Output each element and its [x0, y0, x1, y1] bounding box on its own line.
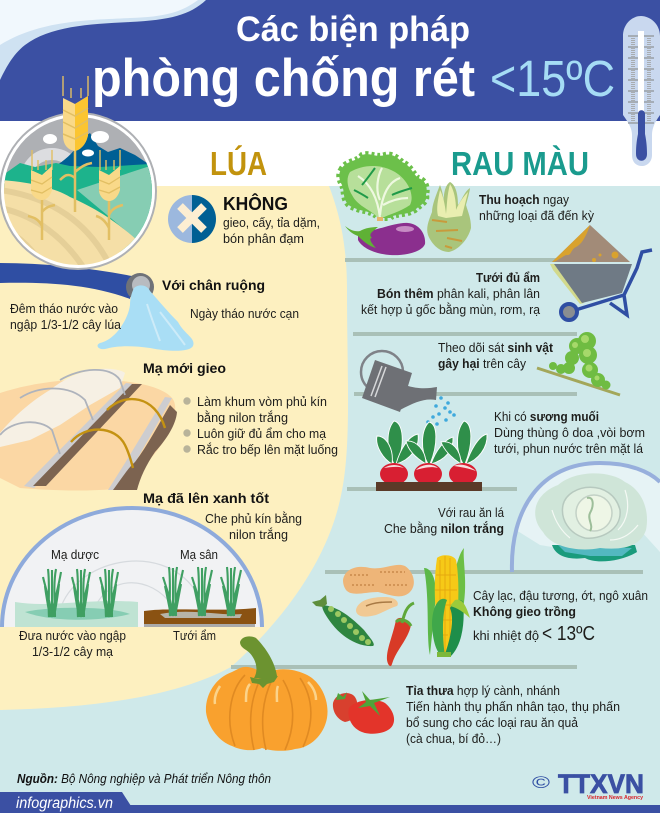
- text: tưới đủ ẩm: Bón thêm phân kali, phân lân: [377, 287, 540, 301]
- panel: lúa background: [0, 186, 348, 710]
- text: sương muối: [494, 410, 645, 456]
- text: không gieo trồng: Cây lạc, đậu tương, ớt, ngô xuân: [473, 589, 648, 603]
- text: tưới đủ ẩm: kết hợp ủ gốc bằng mùn, rơm, rạ: [361, 302, 540, 317]
- title: phòng chống rét: [92, 49, 475, 108]
- illustration: wheelbarrow: [550, 225, 652, 320]
- text: không: gieo, cấy, tỉa dặm,: [223, 216, 320, 230]
- heading: rau màu: RAU MÀU: [451, 145, 589, 182]
- illustration: chili pepper: [387, 603, 414, 666]
- icon: thermometer: [623, 16, 660, 166]
- text: rau ăn lá: [384, 506, 504, 536]
- shelf lines: [231, 258, 643, 669]
- text: mạ mới gieo: [143, 360, 338, 457]
- text: mạ đã lên xanh tốt: nilon trắng: [229, 527, 288, 542]
- illustration: pea pod: [312, 595, 374, 646]
- text: thu hoạch: Thu hoạch ngay: [479, 193, 570, 207]
- text: mạ đã lên xanh tốt: Tưới ẩm: [173, 629, 216, 643]
- text: không gieo trồng: Không gieo trồng: [473, 605, 576, 619]
- logo: TTXVN: TTXVN: [558, 769, 644, 799]
- illustration: pumpkin: [206, 636, 328, 751]
- text: tưới đủ ẩm: [361, 271, 540, 317]
- text: mạ đã lên xanh tốt: Mạ sân: [180, 548, 218, 562]
- title: [92, 10, 615, 108]
- text: sinh vật gây hại: Theo dõi sát sinh vật: [438, 341, 554, 355]
- text: sương muối: tưới, phun nước trên mặt lá: [494, 442, 643, 456]
- text: mạ đã lên xanh tốt: Che phủ kín bằng: [205, 511, 302, 526]
- text: với chân ruộng: Đêm tháo nước vào: [10, 302, 118, 316]
- illustration: watering can: [361, 351, 456, 426]
- illustration: lettuce: [339, 154, 427, 221]
- footer site name: infographics.vn: [16, 795, 113, 812]
- text: với chân ruộng: Ngày tháo nước cạn: [190, 307, 299, 321]
- text: không gieo trồng: [473, 589, 648, 645]
- illustration: radish plants: [376, 421, 487, 491]
- illustration: kohlrabi: [427, 182, 471, 252]
- text: mạ mới gieo: bằng nilon trắng: [197, 410, 288, 425]
- text: sinh vật gây hại: [438, 341, 554, 371]
- text: mạ mới gieo: Rắc tro bếp lên mặt luống: [197, 442, 338, 457]
- illustration: tomatoes: [333, 691, 394, 734]
- logo: TTXVN: Vietnam News Agency: [587, 795, 643, 801]
- text: không: KHÔNG: [223, 193, 288, 214]
- logo: TTXVN: ©: [532, 773, 551, 792]
- water pipe: [0, 263, 132, 299]
- text: những loại: những loại đã đến kỳ: [479, 209, 595, 223]
- text: không gieo trồng: < 13ºC: [542, 623, 595, 645]
- text: tỉa thưa: (cà chua, bí đỏ…): [406, 732, 501, 746]
- illustration: caterpillar on branch: [537, 332, 620, 395]
- text: tưới đủ ẩm: Tưới đủ ẩm: [476, 271, 540, 285]
- illustration: rice seedling dome: [2, 508, 262, 627]
- illustration: seedbed tunnels: [0, 369, 177, 491]
- panel: rau màu background: [0, 186, 660, 813]
- text: tỉa thưa: [406, 684, 620, 746]
- header banner: [0, 0, 660, 121]
- text: với chân ruộng: Với chân ruộng: [162, 277, 265, 293]
- text: mạ mới gieo: Mạ mới gieo: [143, 360, 226, 376]
- text: tỉa thưa: Tiến hành thụ phấn nhân tạo, thụ phấn: [406, 700, 620, 714]
- text: mạ mới gieo: Luôn giữ đủ ẩm cho mạ: [197, 427, 326, 441]
- illustration: wheat field circle: [0, 76, 160, 275]
- text: mạ đã lên xanh tốt: Đưa nước vào ngập: [19, 629, 126, 643]
- text: mạ đã lên xanh tốt: Mạ dược: [51, 548, 99, 562]
- text: sương muối: Khi có sương muối: [494, 410, 599, 424]
- heading: lúa: LÚA: [210, 145, 267, 182]
- illustration: pipe outlet and water: [98, 273, 194, 351]
- illustration: peanuts: [343, 565, 414, 617]
- text: tỉa thưa: bổ sung cho các loại rau ăn quả: [406, 716, 578, 730]
- text: sinh vật gây hại: gây hại trên cây: [438, 357, 527, 371]
- text: mạ mới gieo: Làm khum vòm phủ kín: [197, 395, 327, 409]
- text: mạ đã lên xanh tốt: Mạ đã lên xanh tốt: [143, 490, 269, 506]
- source line: Nguồn: Bộ Nông nghiệp và Phát triển Nông thôn: [17, 771, 271, 786]
- text: rau ăn lá: Với rau ăn lá: [438, 506, 504, 520]
- illustration: eggplant: [345, 223, 425, 255]
- footer bar: [0, 792, 660, 813]
- text: không: [223, 193, 320, 246]
- title: <15ºC: [490, 50, 615, 107]
- text: với chân ruộng: ngập 1/3-1/2 cây lúa: [10, 318, 121, 332]
- text: rau ăn lá: Che bằng nilon trắng: [384, 521, 504, 536]
- illustration: cabbage under dome: [512, 463, 660, 572]
- title: Các biện pháp: [236, 10, 470, 49]
- icon: no sowing cross: [168, 195, 216, 243]
- text: mạ đã lên xanh tốt: [19, 490, 302, 659]
- text: không gieo trồng: khi nhiệt độ: [473, 629, 539, 643]
- text: mạ đã lên xanh tốt: 1/3-1/2 cây mạ: [32, 645, 113, 659]
- text: tỉa thưa: Tỉa thưa hợp lý cành, nhánh: [406, 684, 560, 698]
- text: với chân ruộng: [10, 277, 299, 332]
- text: không: bón phân đạm: [223, 232, 304, 246]
- text: sương muối: Dùng thùng ô doa ,vòi bơm: [494, 426, 645, 440]
- illustration: corn: [424, 548, 470, 657]
